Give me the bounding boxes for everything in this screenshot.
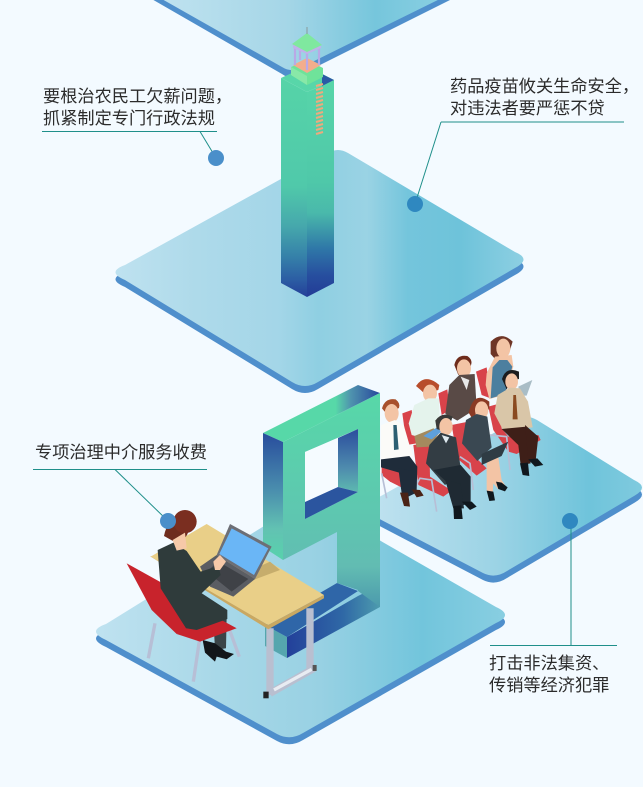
annotation: illegal fundraising: 传销等经济犯罪 <box>489 675 609 695</box>
platform: people plate <box>365 417 642 583</box>
annotation: vaccine safety: 对违法者要严惩不贷 <box>450 98 605 118</box>
platform: top plate <box>143 0 462 78</box>
front face with hole <box>283 393 380 607</box>
annotation: wage arrears: 要根治农民工欠薪问题， <box>43 86 232 106</box>
annotation: wage arrears: 抓紧制定专门行政法规 <box>43 108 215 128</box>
standing woman <box>486 336 513 399</box>
red chairs <box>382 367 541 497</box>
tail underside <box>265 583 358 637</box>
tower <box>281 27 334 297</box>
seated woman <box>158 510 227 630</box>
laptop <box>200 524 280 597</box>
red chair <box>127 563 237 642</box>
desk legs <box>263 608 317 698</box>
pavilion <box>291 27 323 85</box>
hole inner floor <box>305 487 358 519</box>
hole opening <box>305 438 338 502</box>
annotation: vaccine safety <box>407 76 639 212</box>
tower left face <box>281 78 307 297</box>
chair frame <box>148 623 239 682</box>
desk top <box>151 524 324 629</box>
annotation: illegal fundraising: 打击非法集资、 <box>489 653 609 673</box>
people group: seated audience <box>381 336 543 519</box>
annotation: vaccine safety: 药品疫苗攸关生命安全， <box>450 76 639 96</box>
woman's legs and shoes <box>203 617 234 662</box>
platform: desk plate <box>96 502 505 744</box>
top face <box>263 385 380 442</box>
man in brown jacket <box>445 356 477 421</box>
tower right face <box>307 80 334 297</box>
chair legs <box>382 435 510 512</box>
annotation: illegal fundraising <box>489 513 617 695</box>
tail left side <box>265 625 287 658</box>
annotation: wage arrears <box>42 86 232 166</box>
man in white shirt <box>381 399 424 507</box>
desk and woman <box>127 510 324 698</box>
numeral 9 <box>263 385 380 658</box>
woman in pale blouse <box>409 379 443 447</box>
platform: second plate <box>116 150 524 393</box>
tail front <box>287 585 380 658</box>
hole inner side <box>338 429 358 492</box>
man in dark suit <box>426 415 477 519</box>
ladder <box>316 84 323 134</box>
woman with laptop <box>462 398 508 501</box>
annotation: intermediary fees <box>33 442 207 529</box>
left side <box>263 433 283 560</box>
annotation: intermediary fees: 专项治理中介服务收费 <box>35 442 207 462</box>
man in beige shirt <box>494 370 543 476</box>
